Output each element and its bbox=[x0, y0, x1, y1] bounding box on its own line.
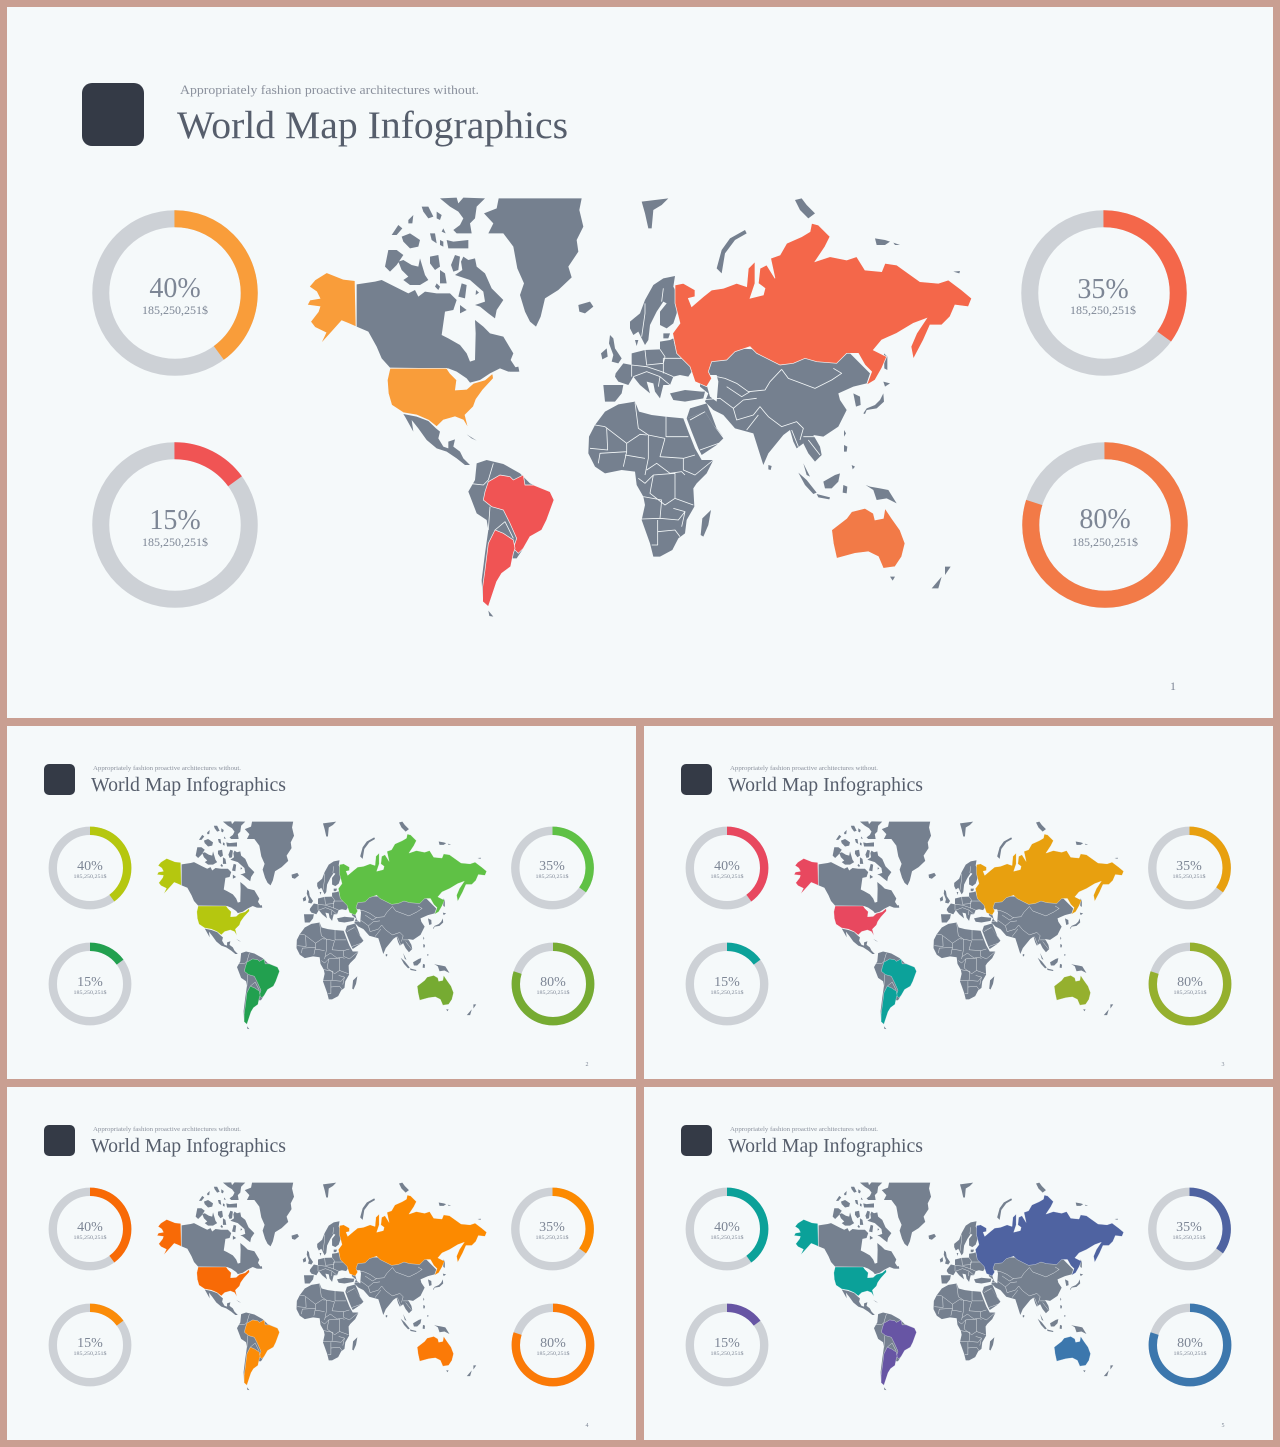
donut: 15%: 15% bbox=[714, 975, 740, 990]
donut: 40%: 40% bbox=[149, 273, 201, 304]
title: World Map Infographics bbox=[91, 1136, 286, 1157]
donut: 35%: 185,250,251$ bbox=[1070, 304, 1136, 317]
icon: dark rounded square bbox=[681, 1125, 712, 1156]
donut: 80%: 185,250,251$ bbox=[1174, 1350, 1207, 1357]
donut: 40% bbox=[690, 1192, 764, 1266]
donut: 80% bbox=[516, 1308, 590, 1382]
donut: 15% bbox=[53, 947, 127, 1021]
subtitle: Appropriately fashion proactive architectures without. bbox=[730, 765, 878, 772]
donut: 15%: 185,250,251$ bbox=[74, 1350, 107, 1357]
donut: 80% bbox=[1153, 1308, 1227, 1382]
subtitle: Appropriately fashion proactive architectures without. bbox=[93, 765, 241, 772]
donut: 35%: 185,250,251$ bbox=[536, 873, 569, 880]
donut: 40%: 185,250,251$ bbox=[710, 1234, 744, 1241]
donut: 40%: 40% bbox=[714, 1220, 740, 1235]
donut: 35% bbox=[1152, 831, 1227, 905]
donut: 15%: 185,250,251$ bbox=[74, 989, 107, 996]
title: World Map Infographics bbox=[728, 775, 923, 796]
donut: 15%: 185,250,251$ bbox=[710, 989, 744, 996]
donut: 35%: 185,250,251$ bbox=[1172, 873, 1206, 880]
donut: 35% bbox=[515, 1192, 590, 1266]
donut: 15% bbox=[690, 1308, 764, 1382]
donut: 80%: 80% bbox=[1079, 504, 1131, 535]
donut: 40%: 185,250,251$ bbox=[142, 304, 208, 317]
world map bbox=[794, 821, 1124, 1029]
donut: 15% bbox=[101, 451, 249, 599]
subtitle: Appropriately fashion proactive architectures without. bbox=[93, 1126, 241, 1133]
icon: dark rounded square bbox=[44, 1125, 75, 1156]
donut: 35%: 35% bbox=[539, 1220, 565, 1235]
world map bbox=[307, 198, 972, 617]
page number: 4 bbox=[586, 1423, 588, 1429]
donut: 40%: 40% bbox=[714, 859, 740, 874]
donut: 40%: 40% bbox=[77, 859, 103, 874]
page number: 2 bbox=[586, 1062, 588, 1068]
donut: 40%: 40% bbox=[77, 1220, 103, 1235]
donut: 15% bbox=[53, 1308, 127, 1382]
donut: 35% bbox=[1030, 219, 1178, 367]
donut: 80%: 185,250,251$ bbox=[536, 989, 570, 996]
icon: dark rounded square bbox=[44, 764, 75, 795]
page number: 3 bbox=[1222, 1062, 1224, 1068]
donut: 35%: 35% bbox=[1176, 859, 1202, 874]
donut: 40% bbox=[101, 219, 249, 367]
donut: 80%: 185,250,251$ bbox=[1174, 989, 1207, 996]
donut: 40%: 185,250,251$ bbox=[74, 873, 107, 880]
title: World Map Infographics bbox=[728, 1136, 923, 1157]
donut: 35%: 35% bbox=[539, 859, 565, 874]
subtitle: Appropriately fashion proactive architectures without. bbox=[180, 82, 479, 97]
title: World Map Infographics bbox=[177, 104, 568, 147]
page number: 5 bbox=[1222, 1423, 1224, 1429]
donut: 80%: 80% bbox=[540, 975, 566, 990]
page number: 1 bbox=[1170, 679, 1176, 693]
donut: 15%: 185,250,251$ bbox=[142, 536, 208, 549]
donut: 35%: 185,250,251$ bbox=[536, 1234, 569, 1241]
world map bbox=[157, 1182, 487, 1390]
donut: 15%: 15% bbox=[77, 975, 103, 990]
donut: 80%: 80% bbox=[1177, 975, 1203, 990]
donut: 35% bbox=[1152, 1192, 1227, 1266]
donut: 80% bbox=[1153, 947, 1227, 1021]
panel: slide 4 orange bbox=[7, 1087, 636, 1440]
donut: 80% bbox=[1031, 451, 1179, 599]
world map bbox=[157, 821, 487, 1029]
donut: 40%: 185,250,251$ bbox=[710, 873, 744, 880]
world map bbox=[794, 1182, 1124, 1390]
donut: 40% bbox=[690, 831, 764, 905]
donut: 40% bbox=[53, 831, 127, 905]
donut: 80%: 80% bbox=[540, 1336, 566, 1351]
donut: 80%: 80% bbox=[1177, 1336, 1203, 1351]
panel: slide 1 main bbox=[7, 7, 1273, 718]
donut: 80%: 185,250,251$ bbox=[1072, 536, 1138, 549]
panel: slide 3 multicolor bbox=[644, 726, 1273, 1079]
icon: dark rounded square bbox=[82, 83, 144, 146]
donut: 15%: 15% bbox=[149, 505, 201, 536]
donut: 35%: 35% bbox=[1176, 1220, 1202, 1235]
donut: 40%: 185,250,251$ bbox=[74, 1234, 107, 1241]
donut: 40% bbox=[53, 1192, 127, 1266]
panel: slide 2 green bbox=[7, 726, 636, 1079]
donut: 35%: 185,250,251$ bbox=[1172, 1234, 1206, 1241]
donut: 35%: 35% bbox=[1077, 274, 1129, 305]
donut: 35% bbox=[515, 831, 590, 905]
icon: dark rounded square bbox=[681, 764, 712, 795]
donut: 15% bbox=[690, 947, 764, 1021]
donut: 15%: 15% bbox=[77, 1336, 103, 1351]
donut: 80% bbox=[516, 947, 590, 1021]
title: World Map Infographics bbox=[91, 775, 286, 796]
donut: 15%: 185,250,251$ bbox=[710, 1350, 744, 1357]
subtitle: Appropriately fashion proactive architectures without. bbox=[730, 1126, 878, 1133]
donut: 15%: 15% bbox=[714, 1336, 740, 1351]
panel: slide 5 blue-teal bbox=[644, 1087, 1273, 1440]
donut: 80%: 185,250,251$ bbox=[536, 1350, 570, 1357]
